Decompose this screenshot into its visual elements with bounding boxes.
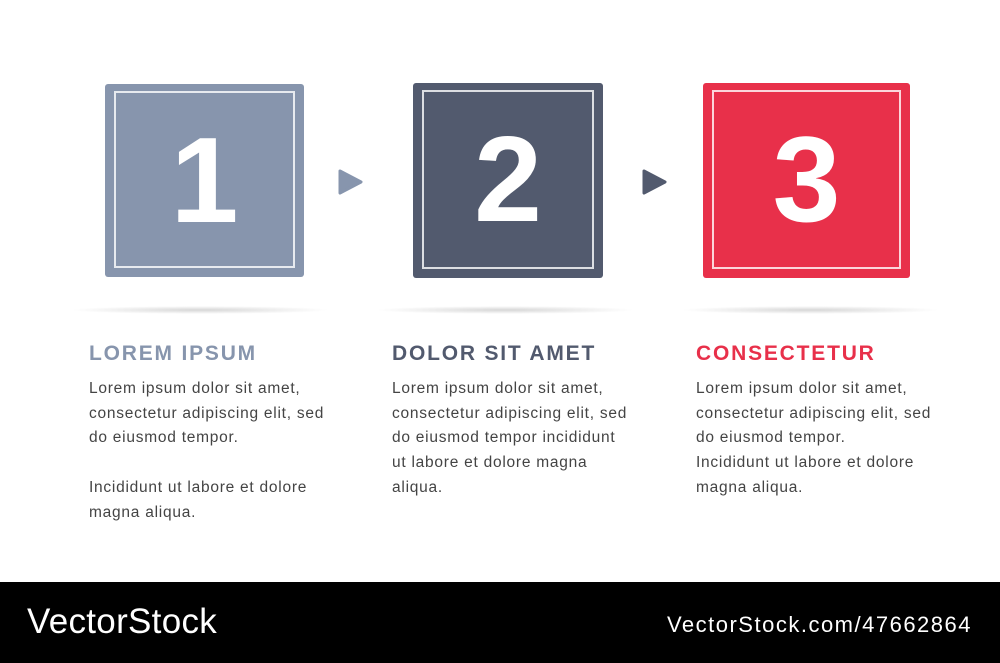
text 1: magna aliqua. bbox=[89, 504, 196, 521]
footer bar bbox=[0, 582, 1000, 663]
number 2: 2 bbox=[474, 111, 542, 247]
text 3: consectetur adipiscing elit, sed bbox=[696, 405, 931, 422]
heading 3: CONSECTETUR bbox=[696, 342, 876, 365]
number 3: 3 bbox=[773, 111, 840, 247]
box 3 bbox=[703, 83, 910, 278]
box 2 bbox=[413, 83, 603, 278]
arrow 1 bbox=[338, 170, 362, 195]
text 2: do eiusmod tempor incididunt bbox=[392, 429, 615, 446]
text 3: magna aliqua. bbox=[696, 479, 803, 496]
text 2 bbox=[392, 380, 627, 496]
text 3: Incididunt ut labore et dolore bbox=[696, 454, 914, 471]
text 2: aliqua. bbox=[392, 479, 443, 496]
text 3: Lorem ipsum dolor sit amet, bbox=[696, 380, 908, 397]
text 3: do eiusmod tempor. bbox=[696, 429, 846, 446]
footer logo: VectorStock bbox=[27, 602, 217, 641]
box 1 bbox=[105, 84, 304, 277]
footer url: VectorStock.com/47662864 bbox=[667, 612, 972, 637]
arrow 2 bbox=[642, 170, 667, 195]
heading 1: LOREM IPSUM bbox=[89, 342, 257, 365]
text 2: ut labore et dolore magna bbox=[392, 454, 587, 471]
heading 2: DOLOR SIT AMET bbox=[392, 342, 596, 365]
number 1: 1 bbox=[171, 112, 238, 248]
text 1: consectetur adipiscing elit, sed bbox=[89, 405, 324, 422]
text 1 bbox=[89, 380, 324, 521]
text 2: Lorem ipsum dolor sit amet, bbox=[392, 380, 604, 397]
text 3 bbox=[696, 380, 931, 496]
text 1: do eiusmod tempor. bbox=[89, 429, 239, 446]
text 1: Incididunt ut labore et dolore bbox=[89, 479, 307, 496]
text 1: Lorem ipsum dolor sit amet, bbox=[89, 380, 300, 397]
text 2: consectetur adipiscing elit, sed bbox=[392, 405, 627, 422]
